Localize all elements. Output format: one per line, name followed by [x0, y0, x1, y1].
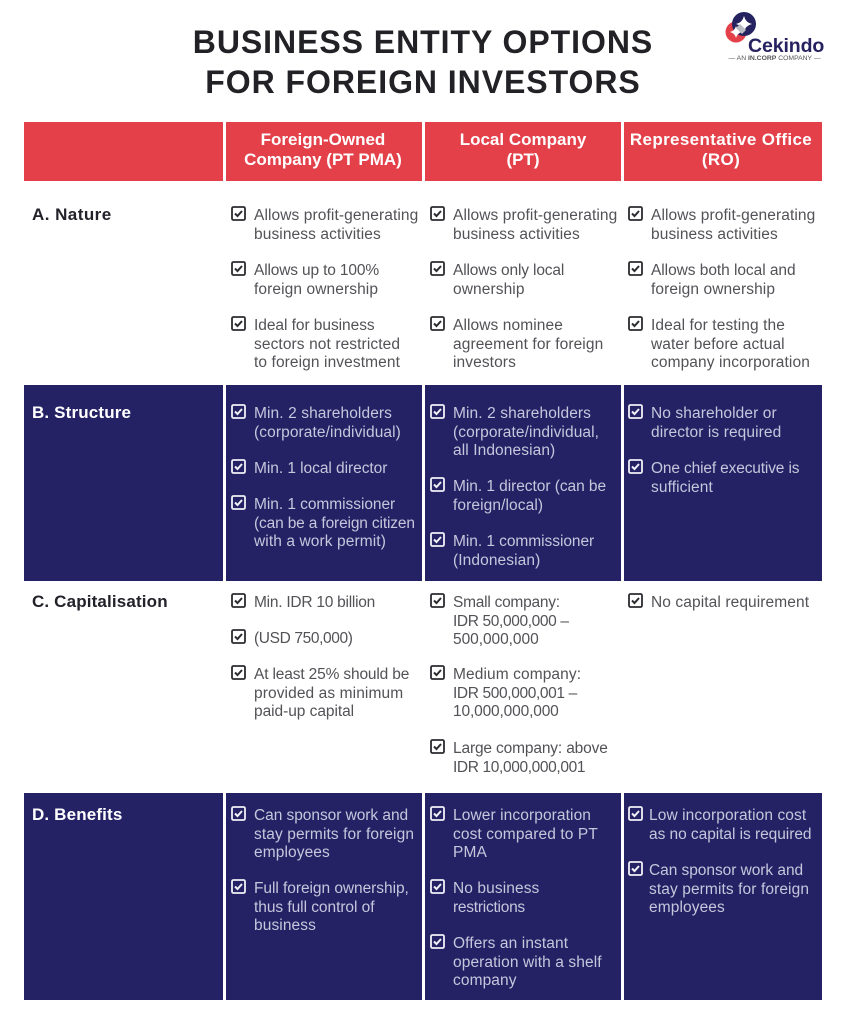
- item: Large company: above: [453, 740, 608, 757]
- item: Allows only local: [453, 262, 564, 279]
- item: [430, 879, 539, 916]
- item: [628, 861, 809, 916]
- item: [430, 316, 603, 371]
- item: Min. IDR 10 billion: [254, 594, 375, 611]
- item: cost compared to PT: [453, 826, 598, 842]
- item: Min. 2 shareholders: [453, 405, 591, 422]
- item: water before actual: [651, 336, 785, 352]
- item: [628, 459, 799, 496]
- item: Min. 1 director (can be: [453, 478, 606, 495]
- item: Ideal for testing the: [651, 317, 785, 334]
- item: [430, 593, 569, 648]
- item: (corporate/individual): [254, 424, 401, 440]
- row: D. Benefits: [24, 793, 822, 1000]
- label: A. Nature: A. Nature: [32, 205, 112, 224]
- logo: Cekindo: [726, 12, 824, 62]
- item: Min. 1 commissioner: [453, 533, 594, 550]
- item: One chief executive is: [651, 460, 799, 477]
- logo: Cekindo: — AN IN.CORP COMPANY —: [728, 55, 821, 62]
- item: company: [453, 972, 517, 989]
- header: Representative Office: [624, 122, 822, 181]
- item: [430, 934, 602, 989]
- item: as no capital is required: [649, 826, 811, 842]
- item: employees: [254, 844, 330, 861]
- item: Allows up to 100%: [254, 262, 379, 279]
- item: Small company:: [453, 594, 560, 611]
- header: Representative Office: (RO): [702, 150, 740, 169]
- item: Can sponsor work and: [254, 807, 408, 824]
- item: Full foreign ownership,: [254, 880, 409, 897]
- item: sufficient: [651, 478, 713, 496]
- item: business activities: [453, 226, 580, 242]
- item: (Indonesian): [453, 552, 540, 568]
- item: [430, 739, 608, 776]
- item: Offers an instant: [453, 935, 568, 952]
- item: [430, 261, 564, 298]
- item: IDR 50,000,000 –: [453, 612, 569, 630]
- item: [231, 495, 415, 550]
- item: 10,000,000,000: [453, 703, 559, 720]
- item: director is required: [651, 424, 781, 440]
- item: Min. 1 commissioner: [254, 496, 395, 513]
- item: paid-up capital: [254, 703, 354, 720]
- item: [628, 261, 796, 298]
- item: [231, 261, 379, 298]
- item: ownership: [453, 280, 525, 298]
- title: BUSINESS ENTITY OPTIONS: [193, 24, 653, 60]
- item: [430, 404, 599, 459]
- item: At least 25% should be: [254, 666, 409, 683]
- header row: [24, 122, 223, 181]
- item: PMA: [453, 844, 487, 861]
- item: sectors not restricted: [254, 336, 400, 352]
- item: Min. 1 local director: [254, 460, 387, 477]
- item: Allows profit-generating: [651, 207, 815, 224]
- item: [231, 316, 400, 371]
- item: [628, 206, 815, 242]
- item: No shareholder or: [651, 405, 777, 422]
- label: C. Capitalisation: C. Capitalisation: [32, 592, 168, 611]
- item: business activities: [651, 226, 778, 242]
- item: Allows profit-generating: [254, 207, 418, 224]
- item: agreement for foreign: [453, 336, 603, 352]
- item: investors: [453, 354, 516, 371]
- item: Allows both local and: [651, 262, 796, 279]
- item: Allows profit-generating: [453, 207, 617, 224]
- label: B. Structure: B. Structure: [32, 403, 131, 422]
- header: Local Company: [425, 122, 621, 181]
- item: foreign/local): [453, 496, 543, 514]
- item: to foreign investment: [254, 354, 400, 371]
- item: operation with a shelf: [453, 954, 602, 970]
- row: A. Nature: [32, 205, 815, 371]
- item: [430, 665, 581, 720]
- item: stay permits for foreign: [649, 880, 809, 898]
- item: [628, 404, 781, 440]
- item: restrictions: [453, 898, 525, 916]
- item: company incorporation: [651, 354, 810, 371]
- item: Allows nominee: [453, 317, 563, 334]
- header: Foreign-Owned Company: Company (PT PMA): [244, 150, 402, 169]
- item: (can be a foreign citizen: [254, 514, 415, 532]
- item: [430, 206, 617, 242]
- item: [628, 316, 810, 371]
- item: [628, 806, 811, 842]
- item: Lower incorporation: [453, 807, 591, 824]
- item: foreign ownership: [651, 280, 775, 298]
- row: C. Capitalisation: [32, 592, 809, 776]
- label: D. Benefits: D. Benefits: [32, 805, 122, 824]
- logo: Cekindo: Cekindo: [748, 35, 824, 57]
- item: business activities: [254, 226, 381, 242]
- item: stay permits for foreign: [254, 826, 414, 842]
- item: Medium company:: [453, 666, 581, 683]
- item: [231, 206, 418, 242]
- header: Local Company: Local Company: [460, 130, 586, 149]
- item: business: [254, 917, 316, 934]
- item: [231, 665, 409, 720]
- item: Min. 2 shareholders: [254, 405, 392, 422]
- title: FOR FOREIGN INVESTORS: [205, 64, 641, 100]
- item: [430, 532, 594, 568]
- item: [231, 404, 401, 440]
- item: Can sponsor work and: [649, 862, 803, 879]
- item: Ideal for business: [254, 317, 375, 334]
- item: No business: [453, 880, 539, 897]
- row: B. Structure: [24, 385, 822, 581]
- item: with a work permit): [254, 533, 386, 550]
- item: (corporate/individual,: [453, 424, 599, 440]
- item: [430, 477, 606, 514]
- item: [231, 879, 409, 934]
- header: Local Company: (PT): [506, 150, 540, 169]
- header: Representative Office: Representative Office: [630, 130, 812, 149]
- header: Foreign-Owned Company: [226, 122, 422, 181]
- item: thus full control of: [254, 898, 374, 916]
- item: Low incorporation cost: [649, 807, 806, 824]
- item: provided as minimum: [254, 684, 403, 702]
- item: employees: [649, 899, 725, 916]
- item: IDR 500,000,001 –: [453, 684, 577, 702]
- item: 500,000,000: [453, 631, 539, 648]
- item: (USD 750,000): [254, 630, 353, 647]
- item: IDR 10,000,000,001: [453, 758, 585, 776]
- header: Foreign-Owned Company: Foreign-Owned: [261, 130, 385, 149]
- item: [231, 806, 414, 861]
- item: foreign ownership: [254, 280, 378, 298]
- title: [193, 24, 653, 100]
- item: No capital requirement: [651, 594, 809, 611]
- item: [430, 806, 598, 861]
- item: all Indonesian): [453, 442, 555, 459]
